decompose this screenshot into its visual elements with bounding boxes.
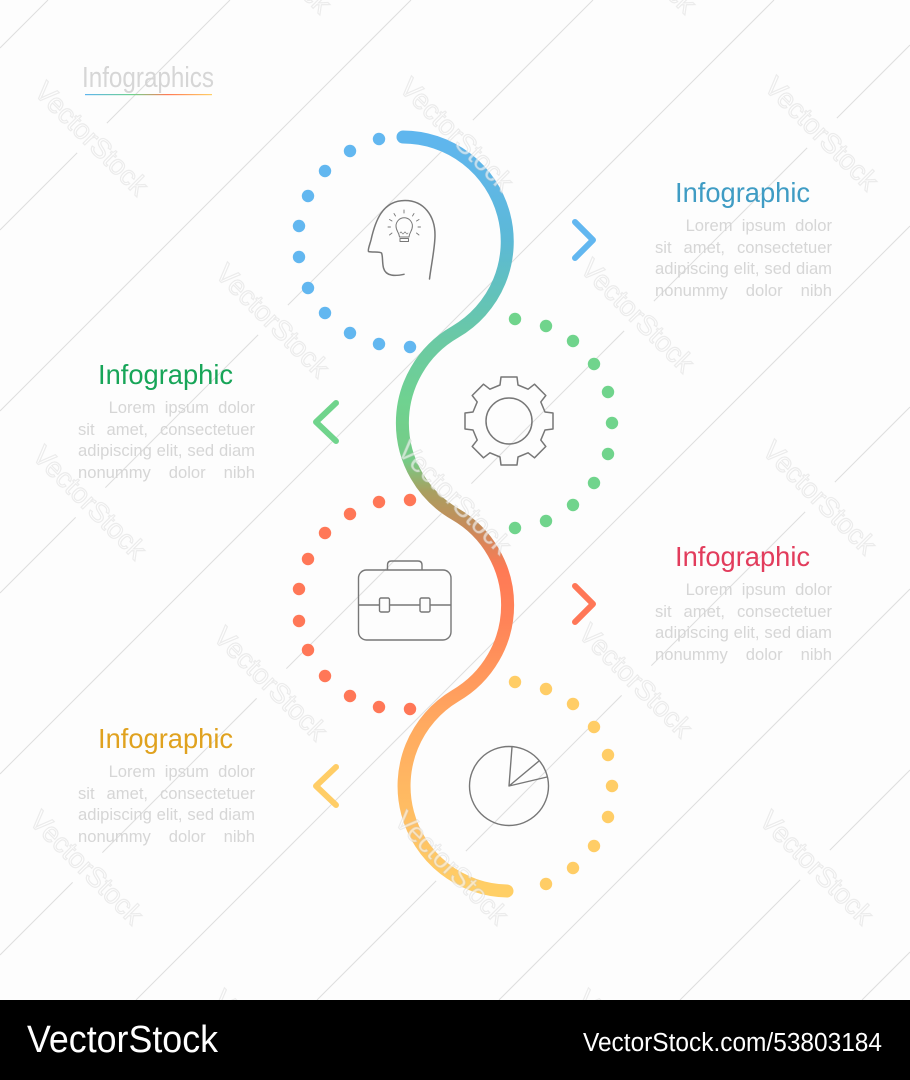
watermarks: VectorStock: [29, 76, 155, 201]
text block: green: [78, 398, 255, 482]
watermarks: VectorStock: [24, 805, 150, 930]
text block: blue: nonummy dolor nibh: [655, 280, 832, 300]
watermarks: VectorStock: [208, 621, 334, 746]
text block: yellow: nonummy dolor nibh: [78, 826, 255, 846]
text block: blue: sit amet, consectetuer: [655, 238, 832, 256]
text block: red: adipiscing elit, sed diam: [655, 623, 832, 642]
arrow: blue: [575, 222, 593, 258]
text block: red: nonummy dolor nibh: [655, 644, 832, 664]
footer id: VectorStock.com/53803184: [583, 1029, 882, 1057]
icon: pie chart: [470, 746, 548, 826]
text block: blue: [655, 216, 832, 300]
text block: blue: Lorem ipsum dolor: [686, 216, 832, 235]
text block: red: Lorem ipsum dolor: [686, 580, 832, 599]
watermarks: VectorStock: [759, 71, 885, 196]
footer bar: [0, 1000, 910, 1080]
text block: yellow: sit amet, consectetuer: [78, 784, 255, 802]
icon: briefcase: [358, 561, 451, 640]
text block: green: adipiscing elit, sed diam: [78, 441, 255, 460]
text block: blue: adipiscing elit, sed diam: [655, 259, 832, 278]
watermarks: VectorStock: [573, 618, 699, 743]
heading: green: Infographic: [98, 359, 233, 390]
icon: gear: [465, 377, 553, 465]
title underline: [85, 94, 212, 95]
red dots: [293, 494, 416, 715]
text block: yellow: [78, 762, 255, 846]
blue dots: [293, 133, 416, 353]
watermarks: VectorStock: [27, 440, 153, 565]
yellow dots: [509, 676, 618, 890]
arrow: green: [316, 403, 336, 441]
winding gradient path: [402, 137, 508, 891]
heading: red: Infographic: [675, 541, 810, 572]
text block: red: sit amet, consectetuer: [655, 602, 832, 620]
watermarks: VectorStock: [575, 253, 701, 378]
text block: green: nonummy dolor nibh: [78, 462, 255, 482]
text block: green: Lorem ipsum dolor: [109, 398, 255, 417]
icon: head with light bulb: [368, 200, 435, 279]
green dots: [509, 313, 618, 534]
arrow: red: [575, 586, 593, 622]
text block: yellow: adipiscing elit, sed diam: [78, 805, 255, 824]
watermarks: VectorStock: [392, 435, 518, 560]
text block: yellow: Lorem ipsum dolor: [109, 762, 255, 781]
title: Infographics: [82, 62, 214, 94]
watermarks: VectorStock: [389, 805, 515, 930]
footer logo: VectorStock: [27, 1019, 219, 1061]
watermarks: VectorStock: [394, 72, 520, 197]
watermarks: VectorStock: [210, 258, 336, 383]
watermarks: VectorStock: [757, 435, 883, 560]
heading: blue: Infographic: [675, 177, 810, 208]
heading: yellow: Infographic: [98, 723, 233, 754]
text block: red: [655, 580, 832, 664]
arrow: yellow: [316, 767, 336, 805]
text block: green: sit amet, consectetuer: [78, 420, 255, 438]
watermarks: VectorStock: [754, 805, 880, 930]
